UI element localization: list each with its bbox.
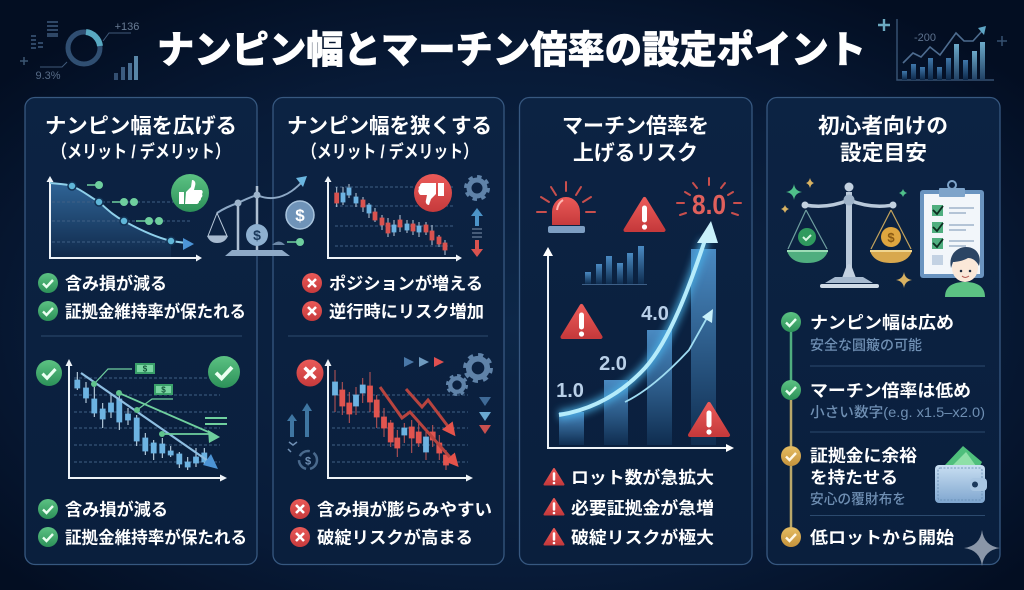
candlestick chart with trend arrows — [66, 359, 227, 482]
list: merits lower — [38, 499, 247, 548]
list: demerits: ポジションが増える — [329, 274, 483, 294]
candlestick chart upper — [324, 176, 462, 262]
growth chart: 1.0 — [556, 380, 584, 402]
icon: gears — [448, 355, 491, 394]
step 2 — [781, 380, 985, 420]
icon: warning — [562, 306, 600, 337]
icon: thumbs up — [171, 174, 209, 212]
panel: raising martin ratio: 上げるリスク — [573, 142, 698, 165]
icon: cross badge — [296, 360, 324, 386]
icon: balance scale with coin — [207, 176, 314, 256]
list: risks: ロット数が急拡大 — [571, 468, 714, 488]
list: merits: 証拠金維持率が保たれる — [65, 302, 246, 322]
step 3: 証拠金に余裕 — [810, 446, 917, 466]
money tag — [154, 384, 173, 395]
panel: beginner guide — [767, 98, 1000, 566]
list: risks: 破綻リスクが極大 — [571, 528, 714, 548]
left header decoration: +136 — [115, 21, 139, 33]
value: 8.0 burst — [677, 178, 741, 220]
icon: clipboard checklist — [920, 181, 984, 278]
money tag: $ — [161, 386, 166, 394]
panel: narrow nanpin — [273, 98, 504, 564]
money tag: $ — [143, 364, 148, 374]
step 2: マーチン倍率は低め — [810, 382, 971, 400]
icon: gear — [466, 177, 488, 199]
value: 8.0 burst: 8.0 — [692, 189, 726, 220]
icon: arrow triangles — [404, 357, 444, 367]
list: demerits — [302, 273, 484, 322]
list: merits — [38, 273, 246, 322]
growth chart: 2.0 — [599, 353, 627, 375]
heading: 初心者向けの — [818, 115, 948, 138]
line chart: gentle averaging — [46, 176, 202, 262]
money tag — [135, 363, 155, 374]
step 4: 低ロットから開始 — [810, 528, 954, 548]
icon: balance scale with coin: $ — [253, 227, 261, 243]
icon: dollar coin: $ — [295, 206, 305, 225]
step 3: を持たせる — [810, 468, 898, 488]
icon: faded coin: $ — [305, 456, 311, 468]
step 2: 小さい数字(e.g. x1.5–x2.0) — [810, 404, 985, 420]
list: merits lower: 証拠金維持率が保たれる — [65, 528, 247, 548]
list: merits: 含み損が減る — [65, 274, 167, 294]
icon: alarm beacon — [537, 182, 595, 233]
list: demerits lower — [290, 499, 492, 548]
list: merits lower: 含み損が減る — [65, 500, 168, 520]
title: ナンピン幅とマーチン倍率の設定ポイント — [157, 30, 866, 72]
icon: down triangles — [479, 397, 491, 434]
step 1: 安全な圓簸の可能 — [810, 337, 922, 353]
icon: balance scale — [787, 182, 912, 288]
icon: warning — [690, 404, 728, 435]
list: demerits: 逆行時にリスク増加 — [329, 302, 484, 322]
icon: small check — [36, 360, 62, 386]
list: demerits lower: 破綻リスクが高まる — [317, 528, 473, 548]
icon: sparkles — [781, 178, 912, 288]
growth chart — [543, 221, 734, 452]
subheading: （メリット / デメリット） — [52, 141, 230, 162]
step 3 — [781, 446, 917, 507]
icon: up down arrows — [471, 208, 483, 257]
step 3: 安心の覆財布を — [810, 491, 906, 507]
left header decoration — [20, 21, 139, 82]
icon: up arrows — [287, 403, 312, 437]
list: demerits lower: 含み損が膨らみやすい — [317, 500, 492, 520]
right header decoration: -200 — [914, 32, 936, 44]
list: risks — [544, 468, 714, 548]
icon: wallet — [935, 446, 987, 503]
icon: thumbs down — [414, 174, 452, 212]
step 1 — [781, 312, 954, 353]
panel: beginner guide: 設定目安 — [840, 142, 927, 165]
heading: ナンピン幅を狭くする — [287, 115, 492, 138]
growth chart: 4.0 — [641, 303, 669, 325]
panel: raising martin ratio — [520, 98, 752, 564]
timeline — [781, 312, 985, 548]
list: risks: 必要証拠金が急増 — [571, 498, 714, 518]
decorative star — [964, 530, 1000, 566]
right header decoration — [878, 19, 1007, 80]
icon: large check — [208, 356, 240, 388]
icon: faded coin — [288, 442, 317, 469]
icon: balance scale: $ — [887, 230, 895, 245]
icon: person — [945, 247, 985, 297]
panel: widen nanpin — [25, 98, 257, 564]
mini bars — [582, 246, 647, 284]
heading: マーチン倍率を — [562, 115, 709, 138]
subheading: （メリット / デメリット） — [302, 141, 478, 162]
left header decoration: 9.3% — [35, 70, 61, 82]
candlestick chart lower — [324, 359, 473, 482]
step 1: ナンピン幅は広め — [810, 314, 954, 332]
heading: ナンピン幅を広げる — [45, 115, 237, 138]
icon: warning — [626, 199, 664, 230]
